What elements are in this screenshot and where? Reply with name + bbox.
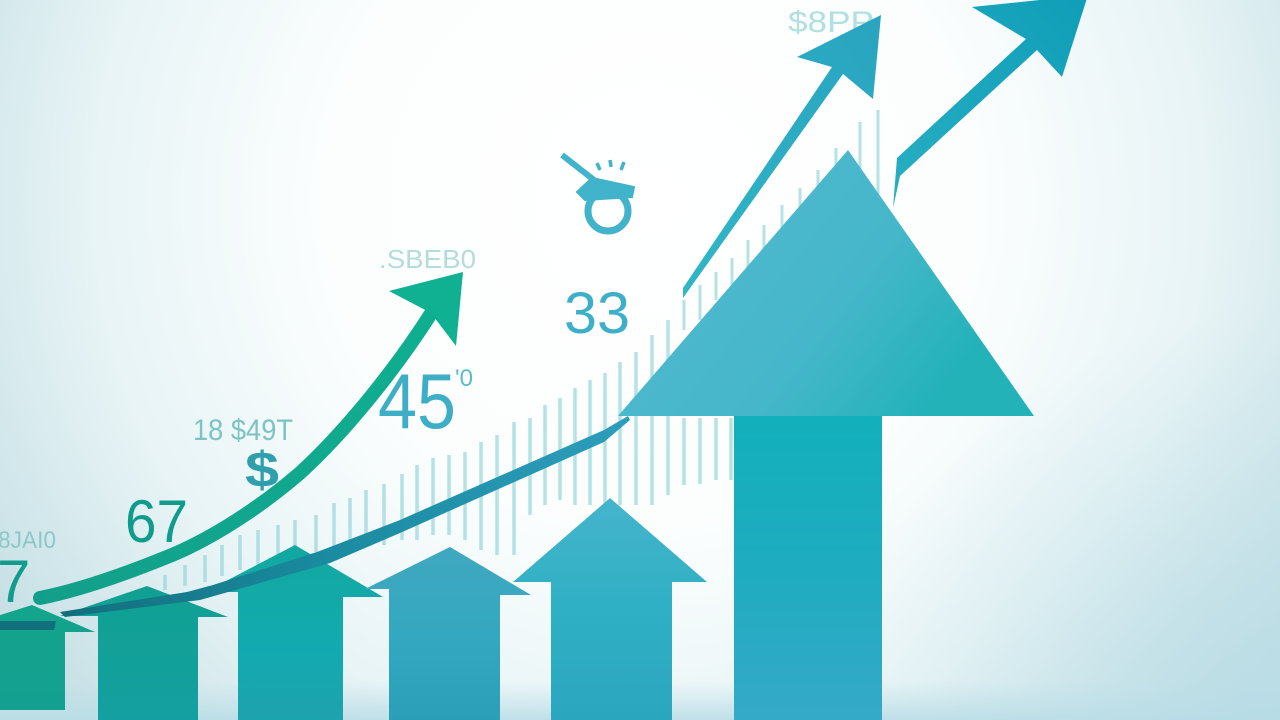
trend line: dark teal band — [60, 416, 630, 617]
arrow: bar arrow 3 — [205, 545, 383, 720]
small label above middle arrow: $8PP — [788, 6, 874, 39]
arrow: big central arrow — [618, 150, 1034, 720]
shadow strip on small arrow — [0, 621, 56, 630]
small label above green arrow: .SBEB0 — [379, 244, 476, 274]
icon: magnifying glass — [562, 155, 634, 231]
arrow: green rising curve — [40, 272, 463, 598]
arrow: middle upper arrow — [683, 15, 881, 298]
icon: dollar sign: $ — [245, 442, 279, 498]
faint rising background bars — [165, 110, 878, 590]
arrow: bar arrow 5 — [513, 498, 707, 720]
arrow: top right arrow — [893, 0, 1088, 208]
number: 33: 33 — [564, 281, 630, 346]
number: 45: 45 — [378, 357, 456, 445]
arrow: bar arrow 2 — [60, 586, 228, 720]
small label: '0: '0 — [455, 365, 473, 392]
arrow: small front arrow 1 — [0, 605, 95, 710]
arrow: bar arrow 4 — [365, 547, 531, 720]
number: 67: 67 — [125, 488, 188, 555]
small label: 18 $49T: 18 $49T — [193, 414, 293, 447]
